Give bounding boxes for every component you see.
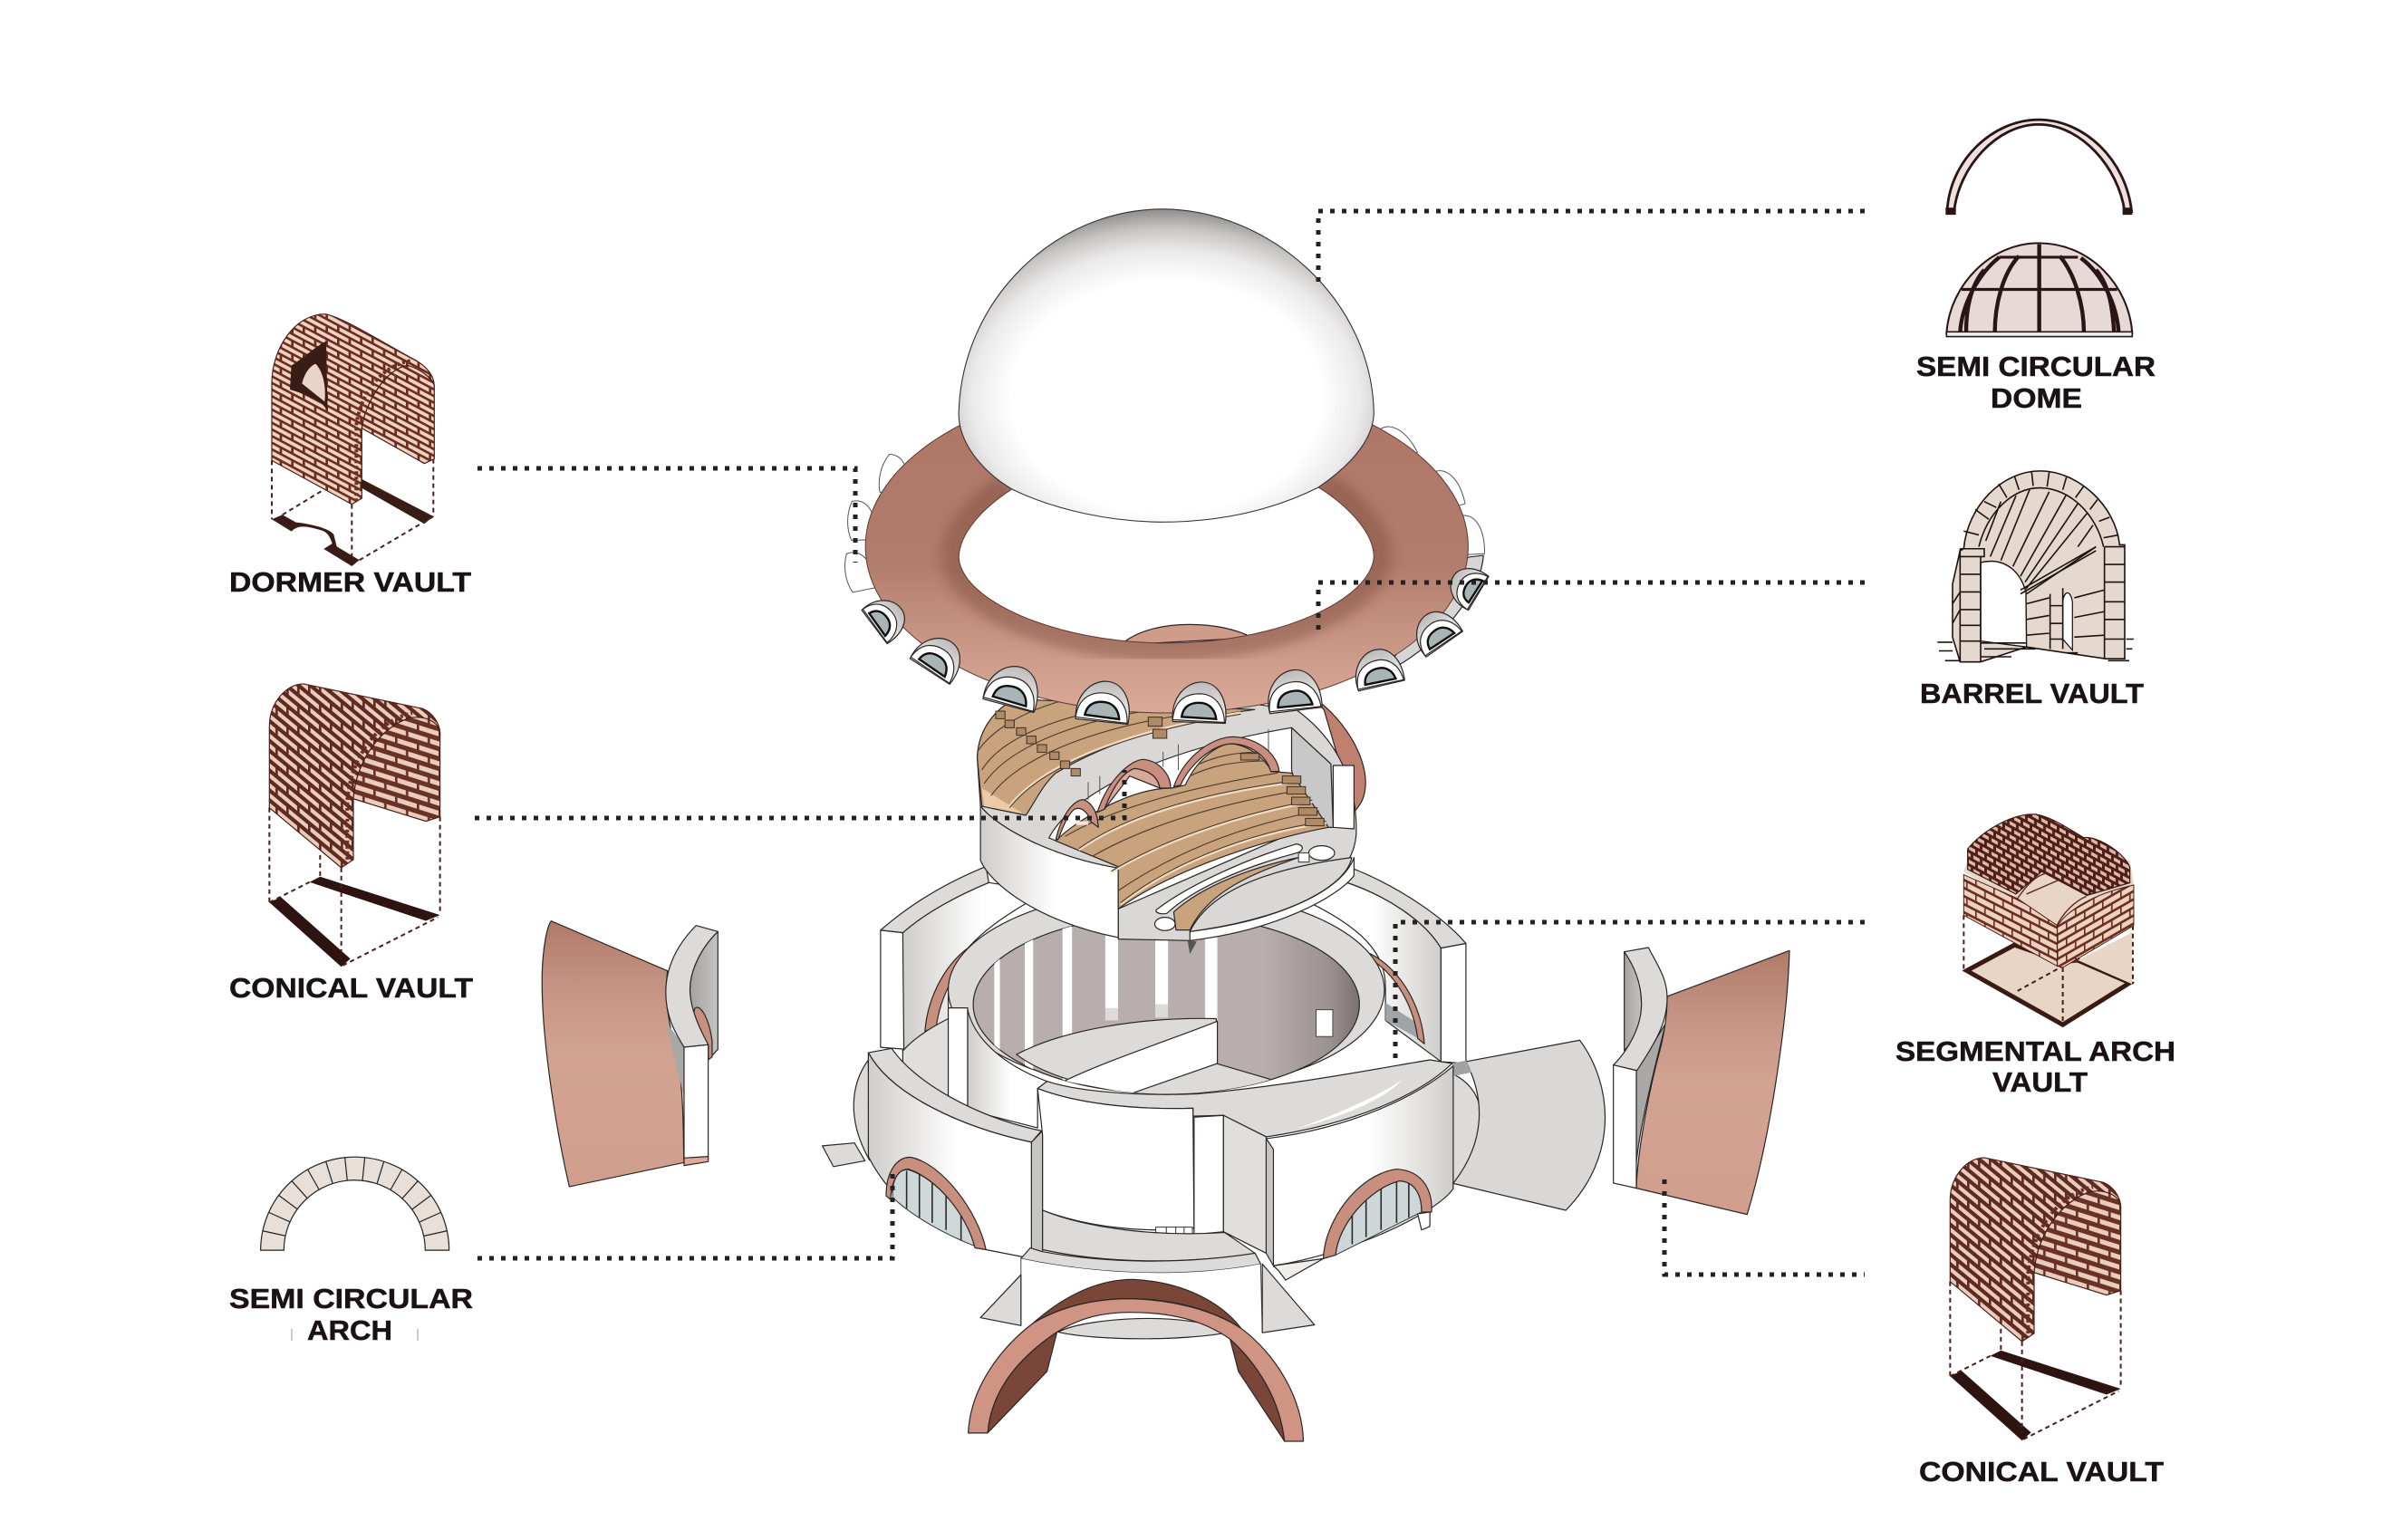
panel: left conical vault diagram xyxy=(229,684,473,1004)
leader: dormer vault xyxy=(477,468,855,563)
hemispherical dome xyxy=(959,209,1374,522)
leader: segmental arch vault xyxy=(1395,922,1865,1065)
rear wall left xyxy=(881,867,1047,1051)
front red arch xyxy=(969,1279,1304,1441)
label: barrel vault: BARREL VAULT xyxy=(1920,678,2144,709)
icon: segmental arch vault xyxy=(1963,814,2134,1025)
label: conical vault: CONICAL VAULT xyxy=(1919,1456,2164,1487)
leader: dome xyxy=(1318,211,1865,283)
icon: dormer vault xyxy=(272,314,434,566)
label: conical vault: CONICAL VAULT xyxy=(229,972,473,1004)
panel: right conical vault diagram xyxy=(1919,1158,2164,1487)
big interior arch xyxy=(1173,736,1279,786)
inner cylinder ring with hole xyxy=(948,910,1384,1094)
top surface gray xyxy=(1037,1060,1452,1137)
drum outer wall xyxy=(980,806,1118,938)
rear wall right xyxy=(1286,868,1466,1064)
label: dormer vault: DORMER VAULT xyxy=(229,566,471,598)
lower slots and lens floor xyxy=(1154,844,1354,954)
conical ring xyxy=(864,424,1469,714)
icon: dome arch section xyxy=(1945,120,2132,215)
panel: right wedge vault piece xyxy=(1614,948,1789,1215)
label: segmental arch: SEGMENTAL ARCH xyxy=(1895,1035,2175,1067)
icon: barrel vault xyxy=(1937,471,2134,662)
grey rim under ring xyxy=(1389,555,1483,669)
opening with back wall xyxy=(1049,727,1354,909)
icon: conical vault xyxy=(1950,1158,2121,1440)
disc under left wall xyxy=(854,1060,870,1160)
leader: right conical vault xyxy=(1664,1179,1865,1275)
drum top surface xyxy=(978,693,1356,940)
stub xyxy=(823,1143,865,1167)
label: vault: VAULT xyxy=(1992,1066,2088,1098)
panel: left wedge vault piece xyxy=(542,921,718,1187)
panel: barrel vault diagram xyxy=(1920,471,2144,709)
panel: dome, ring and dormers xyxy=(844,209,1487,713)
leader: semi circular arch xyxy=(477,1172,892,1258)
label: semi circular: SEMI CIRCULAR xyxy=(1916,351,2156,382)
small interior arch xyxy=(1056,800,1098,840)
panel: semi circular arch diagram xyxy=(229,1157,473,1346)
rear dormers around ring xyxy=(844,419,1487,592)
middle interior arch xyxy=(1097,759,1171,813)
panel: lower tier of exploded building xyxy=(823,867,1606,1441)
front dormers around ring xyxy=(860,561,1489,725)
right front wall with arched window xyxy=(1266,1066,1453,1266)
front gray steps xyxy=(1021,1210,1324,1280)
inner cylinder outer wall xyxy=(902,1008,1047,1128)
label: dome: DOME xyxy=(1991,382,2082,414)
icon: semi circular arch xyxy=(261,1157,449,1250)
panel: segmental arch vault diagram xyxy=(1895,814,2175,1098)
lower seating xyxy=(1056,744,1328,909)
leader: barrel vault xyxy=(1318,582,1865,630)
front block with wings xyxy=(980,1258,1315,1350)
half dome seen through ring xyxy=(1121,624,1252,645)
upper seating xyxy=(978,698,1255,815)
label: semi circular: SEMI CIRCULAR xyxy=(229,1283,473,1314)
panel: dormer vault diagram xyxy=(229,314,471,598)
icon: dome with ribs xyxy=(1946,243,2132,337)
leader: left conical vault xyxy=(475,770,1124,818)
left front wall with arched window xyxy=(868,1048,1043,1258)
side disc and fan floor xyxy=(1452,1040,1606,1210)
red vault behind drum xyxy=(1306,691,1365,813)
panel: auditorium drum tier xyxy=(978,691,1365,954)
label: arch: ARCH xyxy=(307,1314,392,1346)
center white panel xyxy=(1037,1089,1266,1253)
icon: conical vault xyxy=(269,684,440,967)
panel: semi circular dome diagram xyxy=(1916,120,2156,414)
